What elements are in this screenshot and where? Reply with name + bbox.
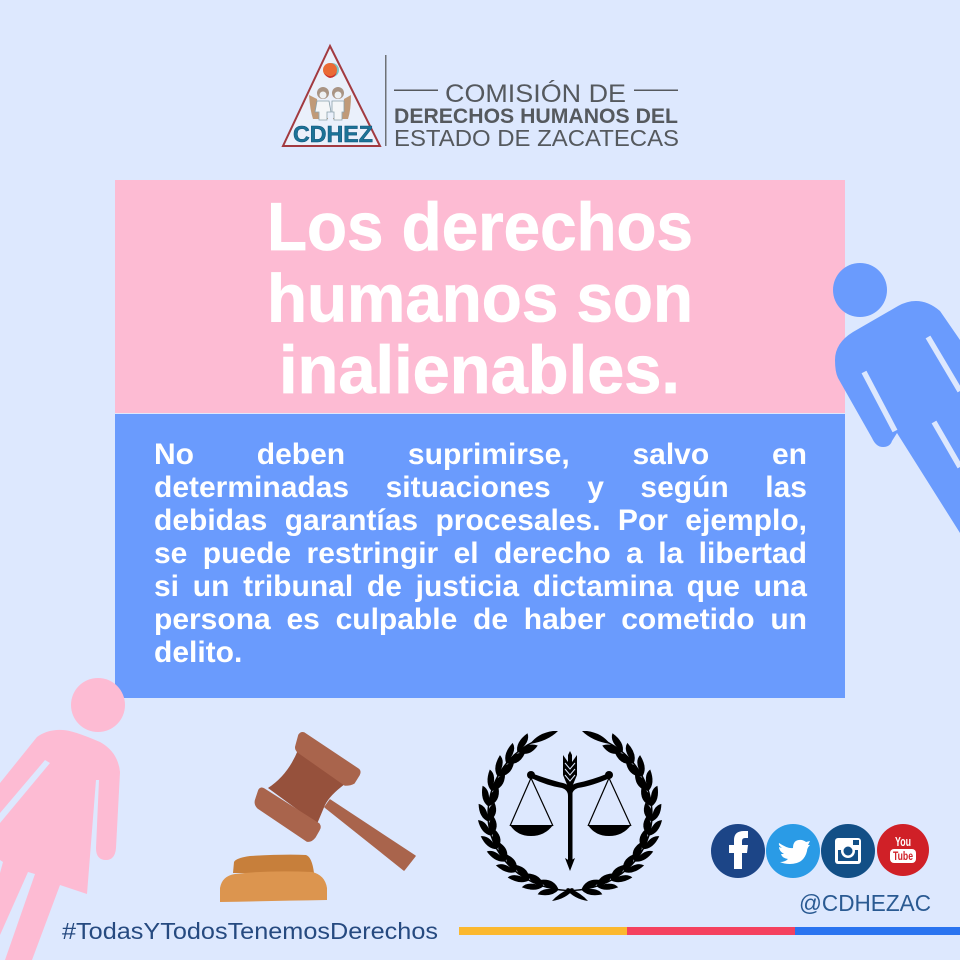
hashtag: #TodasYTodosTenemosDerechos (62, 918, 438, 944)
body text: si un tribunal de justicia dictamina que una (154, 570, 807, 603)
icon: youtube: You (895, 834, 911, 849)
logo: CDHEZ emblem: CDHEZ (293, 121, 373, 147)
arrow and balance (510, 751, 631, 871)
figure: pink woman (0, 678, 125, 960)
panel: pink title panel (115, 180, 845, 413)
icon: youtube (877, 824, 929, 876)
body text: se puede restringir el derecho a la libertad (154, 537, 807, 570)
panel: blue explanation panel (115, 414, 845, 698)
title: inalienables. (279, 332, 680, 408)
title (267, 189, 693, 408)
body text (154, 438, 808, 669)
body text: determinadas situaciones y según las (154, 471, 807, 504)
logo wordmark: DERECHOS HUMANOS DEL (394, 105, 678, 128)
social handle: @CDHEZAC (799, 890, 931, 916)
icon: instagram (821, 824, 875, 878)
body text: persona es culpable de haber cometido un (154, 603, 807, 636)
logo wordmark: ESTADO DE ZACATECAS (394, 125, 679, 151)
title: humanos son (267, 260, 693, 336)
social icons (711, 824, 929, 878)
logo wordmark (394, 79, 679, 151)
body text: No deben suprimirse, salvo en (154, 438, 807, 471)
icon: gavel (220, 733, 415, 902)
icon: facebook (711, 824, 765, 878)
tricolor bar (459, 927, 960, 935)
icon: scales of justice with wreath (478, 731, 662, 901)
figure: blue man (833, 263, 960, 533)
laurel wreath (478, 731, 662, 901)
icon: youtube: Tube (893, 849, 913, 863)
logo wordmark: COMISIÓN DE (445, 79, 626, 108)
body text: delito. (154, 636, 242, 669)
body text: debidas garantías procesales. Por ejemplo, (154, 504, 807, 537)
title: Los derechos (267, 189, 693, 265)
icon: twitter (766, 824, 820, 878)
logo divider (385, 55, 386, 146)
logo: CDHEZ emblem (283, 46, 380, 147)
